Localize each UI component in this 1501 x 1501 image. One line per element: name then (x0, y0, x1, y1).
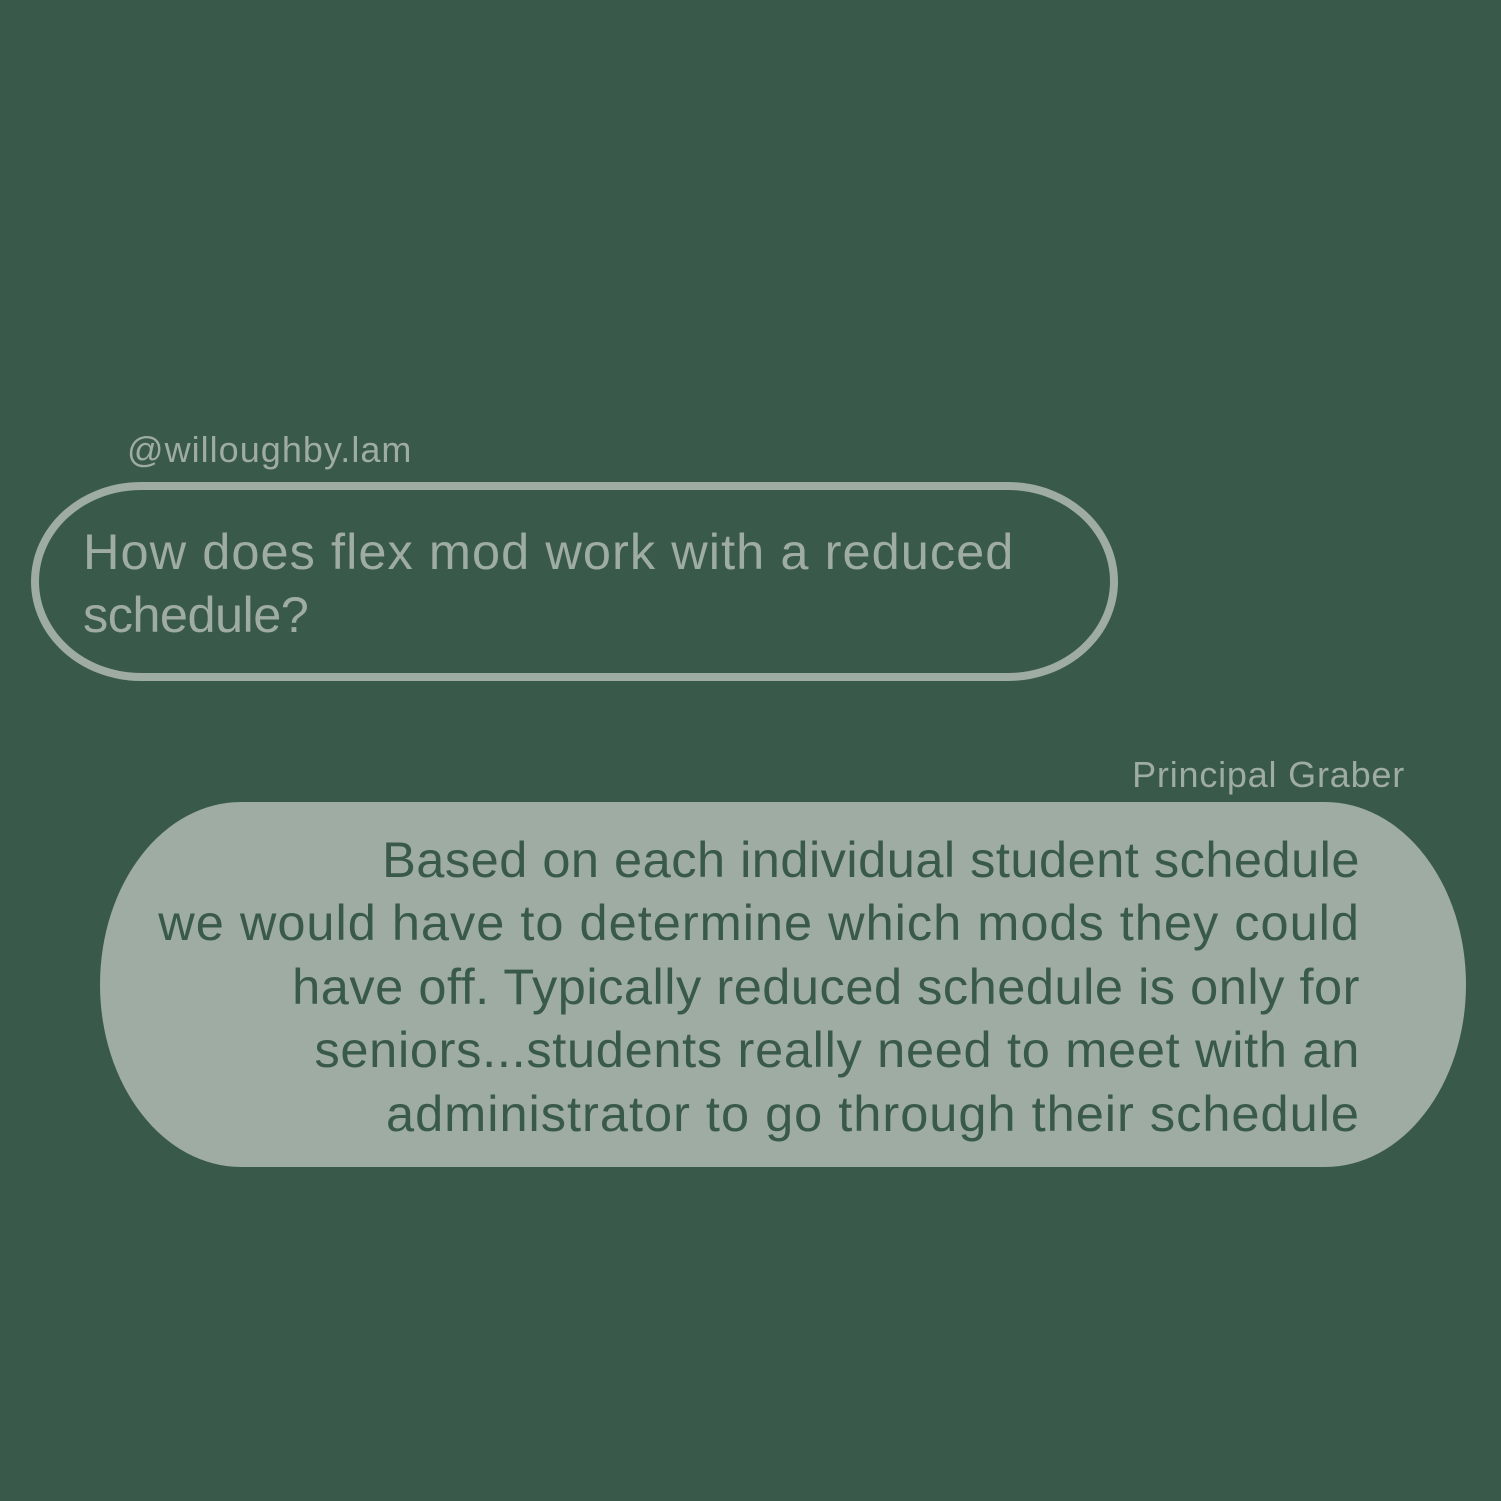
answer text: Based on each individual student schedule (382, 831, 1360, 888)
question bubble (31, 482, 1118, 681)
answer text: seniors...students really need to meet with an (314, 1021, 1360, 1078)
question text: How does flex mod work with a reduced (83, 523, 1014, 580)
question text (83, 523, 1014, 643)
attribution label: Principal Graber (1132, 754, 1405, 795)
answer text (158, 831, 1360, 1142)
answer text: administrator to go through their schedule (386, 1085, 1360, 1142)
answer text: have off. Typically reduced schedule is only for (292, 958, 1360, 1015)
handle label: @willoughby.lam (127, 429, 412, 470)
answer text: we would have to determine which mods they could (158, 894, 1360, 951)
question text: schedule? (83, 586, 308, 643)
answer bubble (100, 802, 1466, 1167)
